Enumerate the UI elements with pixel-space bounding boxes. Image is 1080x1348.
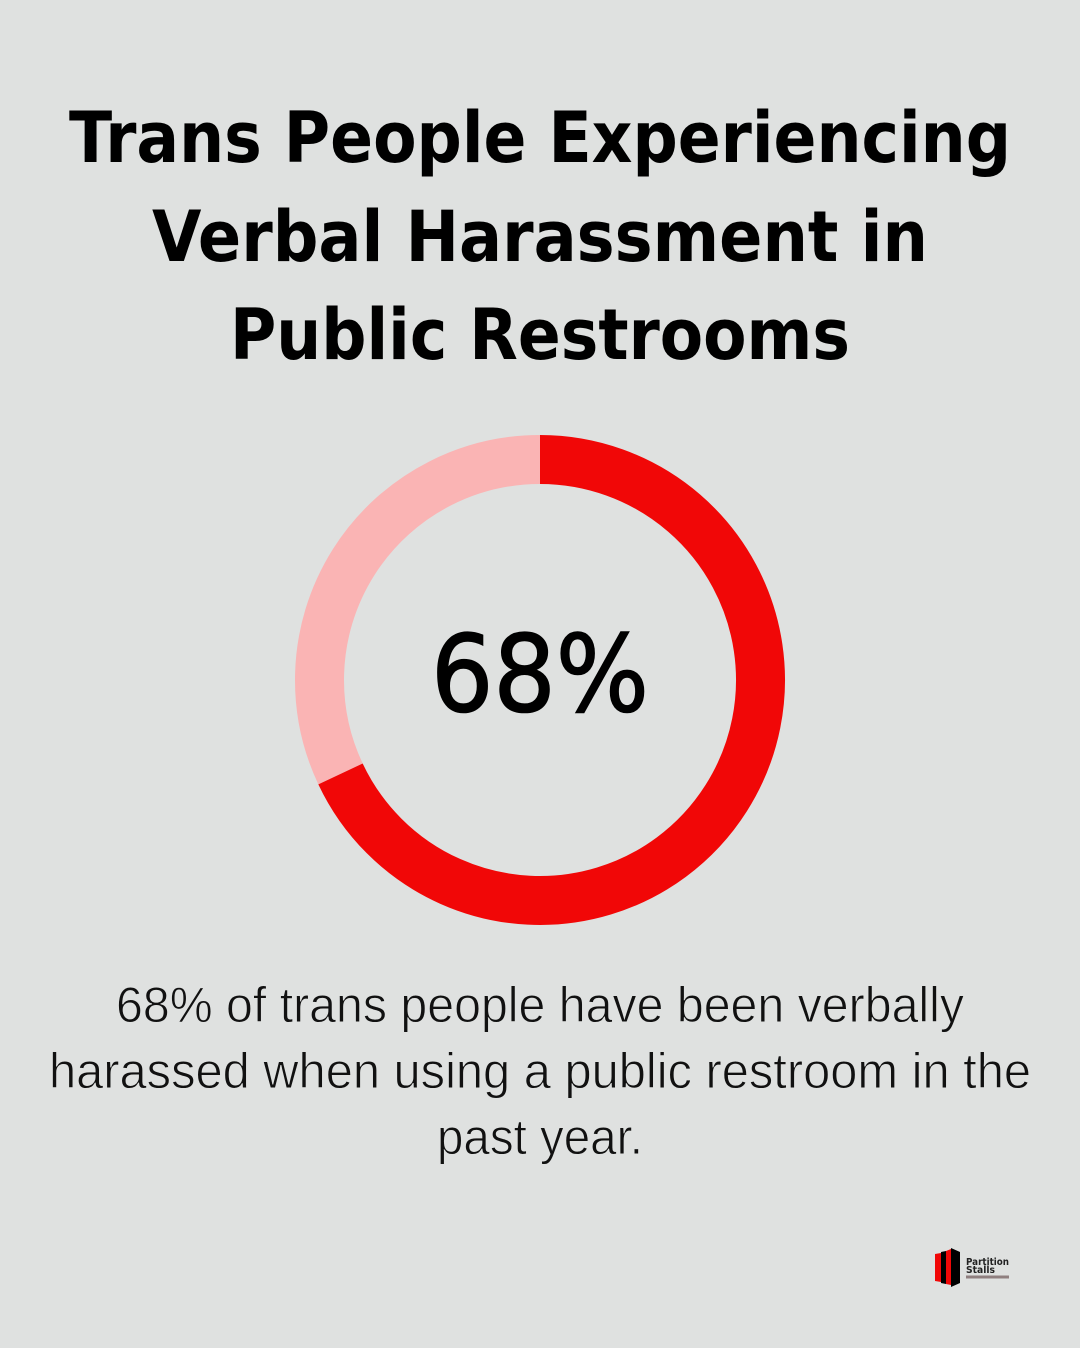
title: Public Restrooms — [230, 294, 850, 376]
donut centre value: 68% — [431, 613, 649, 736]
logo wordmark: Stalls — [966, 1265, 995, 1276]
description text — [49, 977, 1031, 1165]
remaining 32% arc — [320, 460, 540, 774]
logo: Partition Stalls — [935, 1248, 1009, 1287]
logo wordmark: Partition — [966, 1257, 1009, 1268]
highlighted 68% arc — [340, 460, 761, 900]
description text: past year. — [437, 1109, 643, 1165]
title — [69, 97, 1011, 376]
logo underline — [966, 1276, 1009, 1278]
logo wordmark — [966, 1257, 1009, 1276]
icon: partition bars — [935, 1248, 960, 1287]
description text: harassed when using a public restroom in the — [49, 1043, 1031, 1099]
title: Verbal Harassment in — [152, 196, 928, 278]
donut chart: 68% — [320, 460, 761, 900]
description text: 68% of trans people have been verbally — [116, 977, 964, 1033]
